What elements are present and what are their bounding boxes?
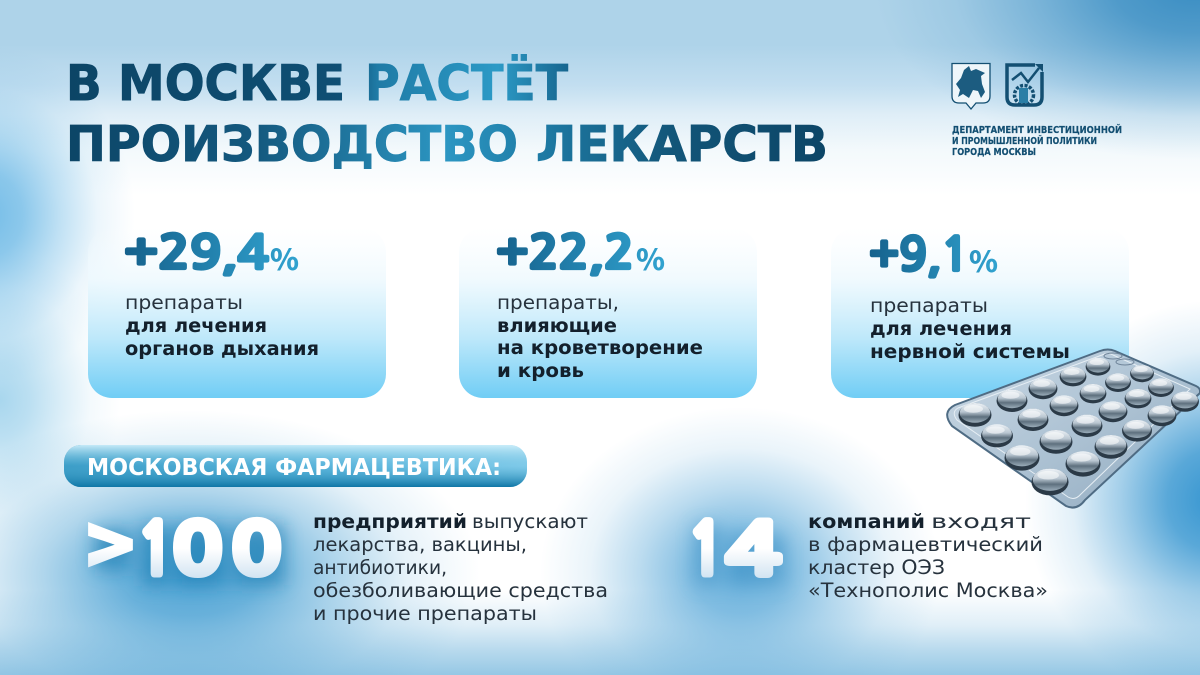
description: для лечения (125, 314, 267, 337)
department name: И ПРОМЫШЛЕННОЙ ПОЛИТИКИ (952, 135, 1097, 147)
stat: >100 enterprises: > (86, 483, 135, 599)
section heading pill: МОСКОВСКАЯ ФАРМАЦЕВТИКА: (87, 453, 501, 481)
stat: 14 companies: 4 (726, 516, 781, 585)
text: companies description: кластер ОЭЗ (808, 556, 945, 579)
description: на кроветворение (497, 336, 703, 359)
department name: ГОРОДА МОСКВЫ (952, 147, 1036, 158)
stat: +29,4%: % (270, 237, 299, 279)
text: companies description (808, 510, 1048, 602)
text: enterprises description: антибиотики, (313, 556, 447, 579)
illustration: blister pack (947, 350, 1200, 508)
icon: department emblem (1007, 64, 1043, 105)
text: enterprises description: предприятий (313, 510, 467, 533)
stat: +29,4% (124, 230, 299, 279)
title (66, 54, 828, 173)
stat: +22,2%: % (636, 237, 665, 279)
stat: >100 enterprises: 0 (232, 516, 282, 585)
description: для лечения (870, 317, 1012, 340)
stat: +9,1%: % (969, 239, 998, 281)
stat: >100 enterprises: 1 (138, 516, 174, 585)
stat: 14 companies (688, 516, 784, 585)
title: В МОСКВЕ (66, 55, 345, 112)
text: enterprises description: и прочие препараты (313, 602, 537, 625)
description: влияющие (497, 314, 617, 337)
description (125, 291, 319, 360)
section heading pill (64, 445, 527, 487)
text: enterprises description: выпускают (472, 510, 588, 533)
panel: blood drugs (459, 228, 757, 398)
description: препараты (870, 294, 988, 317)
text: companies description: входят (931, 510, 1031, 533)
department name (952, 124, 1122, 158)
title: РАСТЁТ (365, 54, 569, 112)
text: companies description: в фармацевтический (808, 533, 1043, 556)
description (497, 291, 703, 382)
description (870, 294, 1070, 363)
description: и кровь (497, 359, 584, 382)
text: companies description: «Технополис Москва» (808, 579, 1048, 602)
text: companies description: компаний (808, 510, 925, 533)
logo: department (952, 64, 1122, 158)
stat: +9,1%: +9,1 (869, 232, 969, 278)
title: ЛЕКАРСТВ (536, 116, 828, 173)
panel: respiratory drugs (88, 228, 386, 398)
stat: >100 enterprises (86, 483, 284, 599)
stat: >100 enterprises: 0 (172, 516, 222, 585)
description: препараты, (497, 291, 619, 314)
description: органов дыхания (125, 337, 319, 360)
stat: +29,4%: +29,4 (124, 230, 269, 276)
text: enterprises description: лекарства, вакцины, (313, 533, 527, 556)
text: enterprises description: обезболивающие средства (313, 579, 608, 602)
description: препараты (125, 291, 243, 314)
stat: 14 companies: 1 (688, 516, 724, 585)
title: ПРОИЗВОДСТВО (66, 116, 518, 173)
icon: Moscow coat of arms (952, 64, 990, 109)
department name: ДЕПАРТАМЕНТ ИНВЕСТИЦИОННОЙ (952, 124, 1122, 136)
panel: nervous system drugs (831, 228, 1129, 398)
description: нервной системы (870, 340, 1070, 363)
text: enterprises description (313, 510, 608, 625)
stat: +22,2%: +22,2 (496, 230, 634, 276)
